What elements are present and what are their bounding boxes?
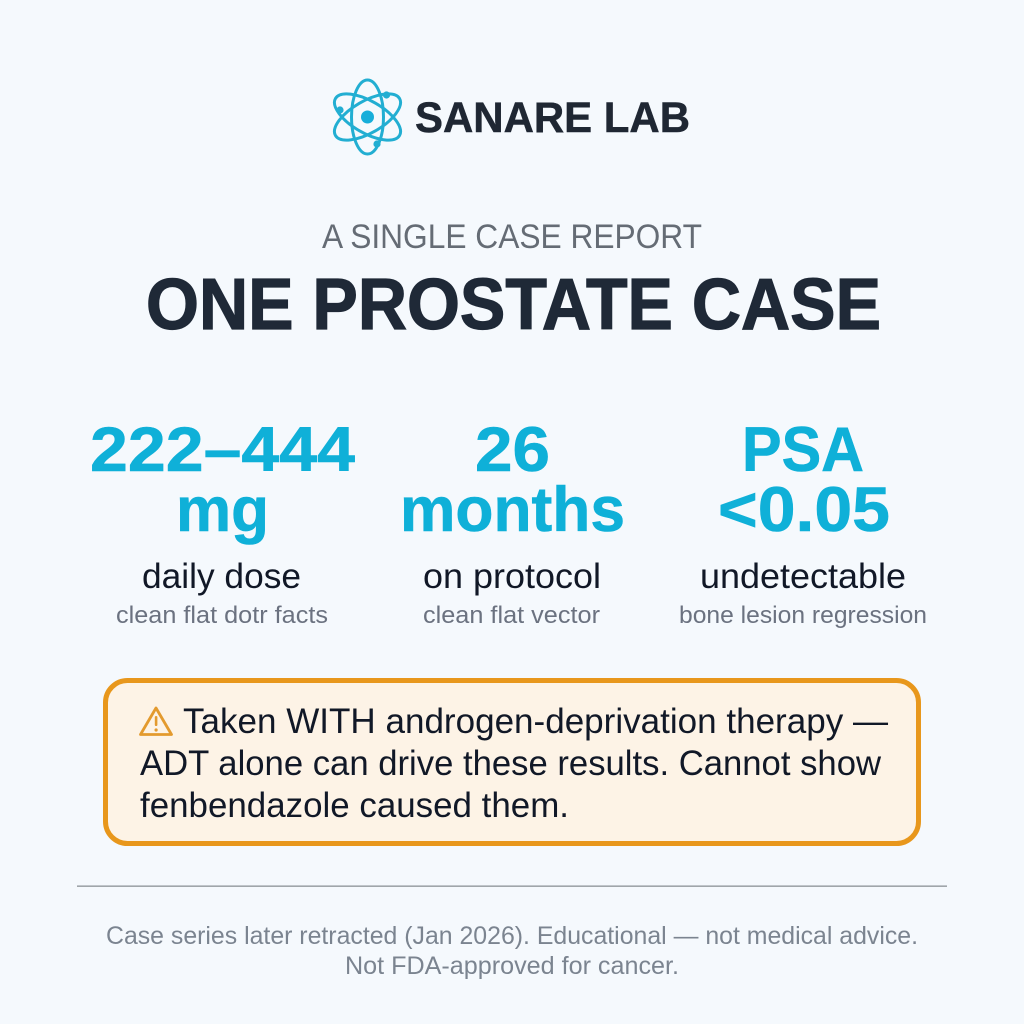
footer disclaimer: Not FDA-approved for cancer. xyxy=(345,952,679,980)
warning text: ADT alone can drive these results. Cannot show xyxy=(140,744,882,783)
stat: daily dose: 222–444 xyxy=(90,415,355,485)
stat: daily dose: daily dose xyxy=(142,557,301,596)
title: ONE PROSTATE CASE xyxy=(146,265,881,345)
footer disclaimer xyxy=(106,922,918,980)
stat: months on protocol: on protocol xyxy=(423,557,601,596)
callout: ADT warning xyxy=(106,680,918,844)
stat: months on protocol: 26 xyxy=(475,415,550,485)
icon: warning triangle xyxy=(140,708,172,734)
warning text: fenbendazole caused them. xyxy=(140,786,569,825)
stat: PSA undetectable: bone lesion regression xyxy=(679,602,927,629)
stat: daily dose xyxy=(90,415,355,629)
footer disclaimer: Case series later retracted (Jan 2026). Educational — not medical advice. xyxy=(106,922,918,950)
icon: atom xyxy=(327,80,408,154)
stat: PSA undetectable: PSA xyxy=(742,415,864,485)
warning text xyxy=(140,702,888,825)
stat: months on protocol: months xyxy=(400,475,625,545)
stat: months on protocol: clean flat vector xyxy=(423,602,600,629)
stat: daily dose: clean flat dotr facts xyxy=(116,602,328,629)
stat: PSA undetectable: undetectable xyxy=(700,557,906,596)
stat: months on protocol xyxy=(400,415,625,629)
eyebrow heading: A SINGLE CASE REPORT xyxy=(322,218,702,256)
stat: PSA undetectable xyxy=(679,415,927,629)
stat: daily dose: mg xyxy=(176,475,269,545)
warning text: Taken WITH androgen-deprivation therapy — xyxy=(183,702,888,741)
stat: PSA undetectable: <0.05 xyxy=(718,475,890,545)
brand name: SANARE LAB xyxy=(415,94,690,142)
logo: Sanare Lab xyxy=(327,80,690,154)
